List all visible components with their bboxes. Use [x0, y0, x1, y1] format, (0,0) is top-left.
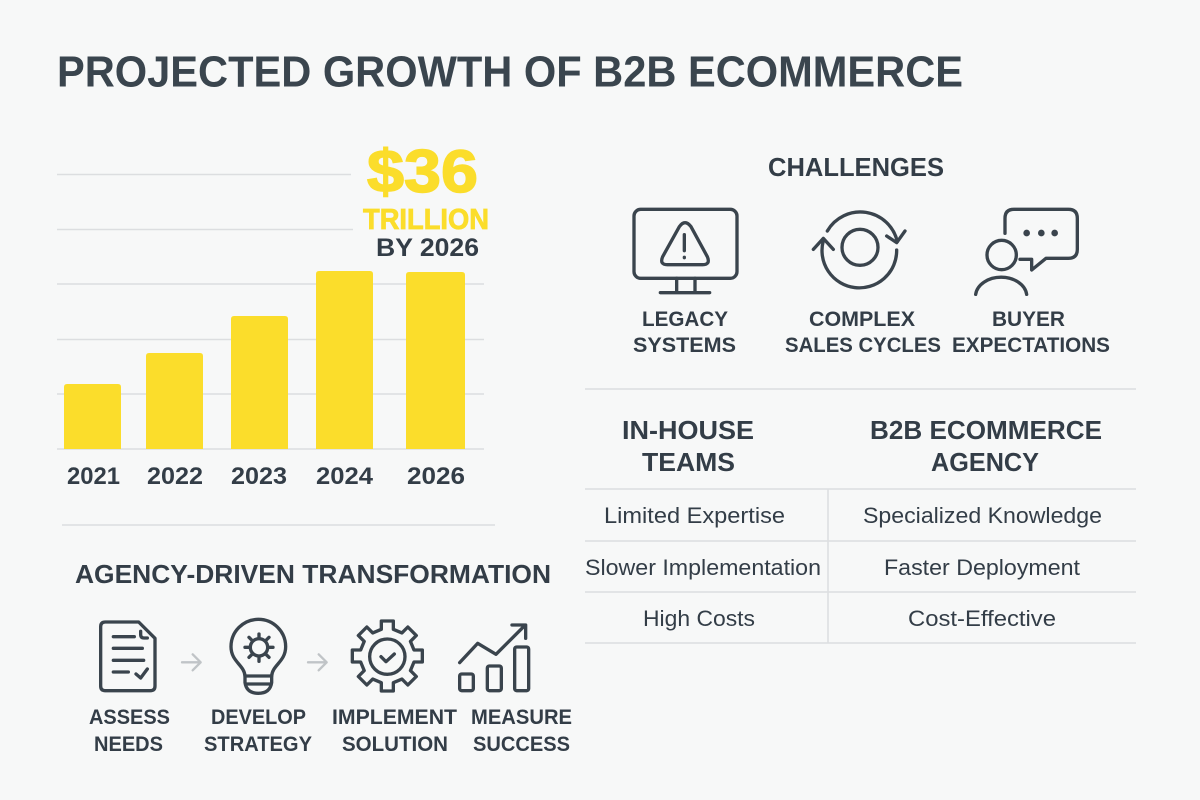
icon: light bulb [231, 619, 286, 693]
icons [101, 619, 529, 693]
challenge labels: EXPECTATIONS [952, 334, 1110, 357]
title: PROJECTED GROWTH OF B2B ECOMMERCE [57, 48, 963, 96]
challenge labels [633, 308, 1110, 357]
year labels: 2024 [316, 463, 373, 490]
step labels: SOLUTION [342, 733, 448, 756]
panel: bar chart [57, 174, 484, 490]
column heading: b2b ecommerce agency: AGENCY [931, 447, 1039, 477]
step labels: IMPLEMENT [332, 706, 457, 729]
icon: growth chart [460, 625, 529, 691]
bar 2022 [146, 353, 203, 449]
challenge labels: LEGACY [642, 308, 728, 331]
column heading: in-house teams: IN-HOUSE [622, 415, 754, 445]
panel: agency-driven transformation [75, 559, 572, 756]
bar 2023 [231, 316, 288, 449]
row: cost [643, 606, 1056, 631]
icons [634, 209, 1077, 294]
year labels: 2026 [407, 463, 465, 490]
challenge labels: BUYER [992, 308, 1065, 331]
icon: document [101, 622, 155, 691]
step labels: NEEDS [94, 733, 163, 756]
icon: cycle [813, 212, 905, 288]
callout: $36 trillion by 2026: $36 [367, 138, 478, 205]
year labels: 2023 [231, 463, 287, 490]
icon: person with speech bubble [976, 209, 1077, 294]
year labels: 2021 [67, 463, 120, 490]
step labels: STRATEGY [204, 733, 312, 756]
column heading: b2b ecommerce agency [870, 415, 1102, 477]
callout: $36 trillion by 2026: BY 2026 [376, 234, 479, 262]
step labels: ASSESS [89, 706, 170, 729]
panel: comparison table [585, 415, 1136, 643]
heading: AGENCY-DRIVEN TRANSFORMATION [75, 559, 551, 589]
heading: CHALLENGES [768, 152, 944, 182]
row: expertise: Specialized Knowledge [863, 503, 1102, 528]
row: speed [585, 555, 1080, 580]
icon: gear [352, 621, 422, 691]
step labels: MEASURE [471, 706, 572, 729]
icon: monitor with warning [634, 209, 737, 293]
challenge labels: SALES CYCLES [785, 334, 941, 357]
challenge labels: COMPLEX [809, 308, 915, 331]
step labels [89, 706, 572, 756]
bar 2024 [316, 271, 373, 449]
column heading: in-house teams: TEAMS [642, 447, 735, 477]
challenge labels: SYSTEMS [633, 334, 736, 357]
arrow [308, 654, 327, 670]
arrow [182, 654, 201, 670]
callout: $36 trillion by 2026 [363, 138, 489, 262]
year labels [67, 463, 465, 490]
year labels: 2022 [147, 463, 203, 490]
panel: challenges [633, 152, 1110, 357]
column heading: in-house teams [622, 415, 754, 477]
bar 2026 [406, 272, 465, 449]
row: cost: Cost-Effective [908, 606, 1056, 631]
bar 2021 [64, 384, 121, 449]
row: speed: Faster Deployment [884, 555, 1080, 580]
step labels: DEVELOP [211, 706, 306, 729]
row: expertise: Limited Expertise [604, 503, 785, 528]
row: speed: Slower Implementation [585, 555, 821, 580]
row: cost: High Costs [643, 606, 755, 631]
row: expertise [604, 503, 1102, 528]
step labels: SUCCESS [473, 733, 570, 756]
column heading: b2b ecommerce agency: B2B ECOMMERCE [870, 415, 1102, 445]
callout: $36 trillion by 2026: TRILLION [363, 204, 489, 236]
